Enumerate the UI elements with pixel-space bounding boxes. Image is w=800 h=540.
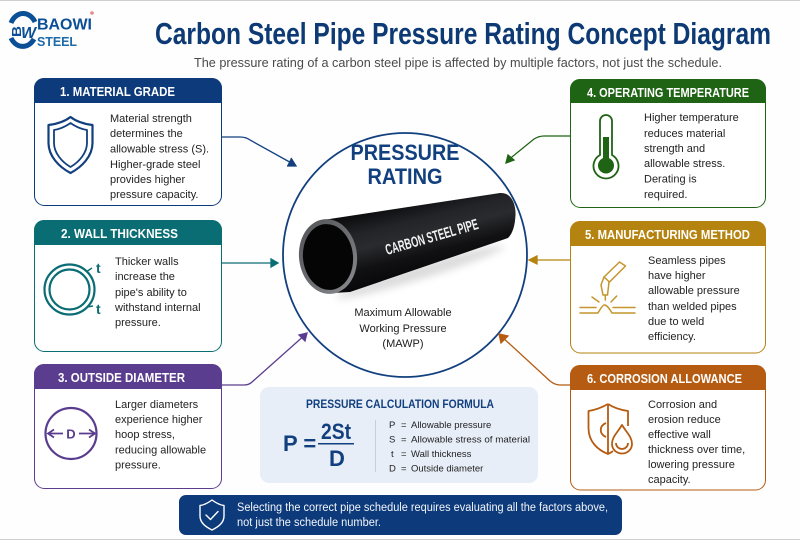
legend: formula variables: = (401, 420, 407, 431)
heading: manufacturing method: 5. MANUFACTURING METHOD (585, 227, 750, 242)
logo: Baowi Steel: BAOWI (37, 16, 92, 34)
formula: P = 2St / D: D (329, 446, 345, 471)
central circle: pressure rating (283, 133, 527, 377)
heading: operating temperature: 4. OPERATING TEMPERATURE (587, 85, 749, 100)
formula: P = 2St / D: P = (283, 431, 316, 456)
text: outside diameter: reducing allowable (115, 444, 206, 456)
arrow: corrosion allowance to centre (499, 334, 570, 385)
legend: formula variables: Allowable stress of material (411, 434, 530, 446)
text: manufacturing method: due to weld (648, 316, 704, 328)
panel: 2. wall thickness (34, 220, 222, 352)
subtitle: The pressure rating of a carbon steel pipe is affected by multiple factors, not just the schedule. (194, 56, 722, 70)
legend: formula variables: Wall thickness (411, 449, 472, 460)
text: wall thickness (114, 256, 201, 329)
heading: wall thickness: 2. WALL THICKNESS (61, 226, 178, 241)
text: wall thickness: increase the (115, 271, 175, 283)
legend: formula variables: = (401, 449, 407, 460)
panel: 3. outside diameter (34, 364, 222, 488)
text: manufacturing method: efficiency. (648, 331, 696, 343)
text: MAWP: Working Pressure (359, 323, 447, 335)
formula: P = 2St / D: 2St (321, 419, 352, 444)
heading: pressure rating (350, 140, 460, 189)
text: MAWP: Maximum Allowable (354, 307, 452, 319)
logo: Baowi Steel (9, 11, 94, 49)
legend: formula variables (389, 420, 530, 474)
text: material grade: provides higher (110, 174, 186, 186)
text: wall thickness: pipe's ability to (115, 287, 187, 299)
text: corrosion allowance: thickness over time, (648, 444, 745, 456)
arrow: material grade to centre (222, 137, 296, 166)
image: carbon steel pipe (295, 193, 516, 304)
text: operating temperature: required. (644, 189, 687, 201)
panel: 1. material grade (34, 78, 222, 206)
text: takeaway: not just the schedule number. (237, 517, 381, 529)
icon: corroded shield and drop (588, 404, 632, 454)
arrow: manufacturing method to centre (529, 256, 570, 264)
panel: 5. manufacturing method (570, 221, 766, 353)
panel: pressure calculation formula (260, 387, 538, 483)
text: operating temperature: Higher temperature (644, 112, 739, 124)
legend: formula variables: = (401, 434, 407, 446)
legend: formula variables: Outside diameter (411, 464, 483, 474)
text: outside diameter: Larger diameters (115, 399, 199, 411)
text: material grade: allowable stress (S). (110, 144, 209, 156)
heading: corrosion allowance: 6. CORROSION ALLOWANCE (587, 371, 742, 386)
text: corrosion allowance: erosion reduce (648, 414, 721, 426)
legend: formula variables: = (401, 464, 407, 474)
arrow: wall thickness to centre (222, 259, 278, 267)
text: outside diameter (115, 399, 206, 472)
text: material grade: determines the (110, 128, 183, 140)
logo: Baowi Steel: B (9, 26, 24, 37)
text: material grade: Higher-grade steel (110, 159, 200, 171)
text: operating temperature: reduces material (644, 128, 725, 140)
text: wall thickness: pressure. (115, 317, 161, 329)
icon: shield (48, 117, 92, 173)
icon: shield check (200, 500, 224, 530)
text: MAWP (354, 307, 452, 350)
legend: formula variables: P (389, 420, 395, 431)
text: manufacturing method: Seamless pipes (648, 255, 726, 267)
text: corrosion allowance: lowering pressure (648, 459, 735, 471)
text: corrosion allowance: effective wall (648, 429, 711, 441)
text: wall thickness: Thicker walls (115, 256, 179, 268)
text: manufacturing method: have higher (648, 270, 706, 282)
icon: diameter circle: D (66, 426, 76, 442)
icon: thermometer (594, 115, 618, 178)
heading: pressure rating: PRESSURE (350, 140, 460, 165)
banner: takeaway (179, 495, 622, 535)
legend: formula variables: Allowable pressure (411, 420, 491, 431)
text: corrosion allowance: Corrosion and (648, 399, 717, 411)
icon: welding torch (580, 262, 635, 313)
text: material grade (110, 113, 209, 201)
legend: formula variables: D (389, 464, 396, 474)
heading: outside diameter: 3. OUTSIDE DIAMETER (58, 370, 186, 385)
arrow: outside diameter to centre (222, 333, 307, 385)
legend: formula variables: S (389, 434, 395, 446)
text: outside diameter: hoop stress, (115, 429, 175, 441)
heading: material grade: 1. MATERIAL GRADE (60, 84, 175, 99)
text: MAWP: (MAWP) (382, 338, 424, 350)
text: operating temperature: allowable stress. (644, 158, 725, 170)
heading: pressure rating: RATING (368, 164, 442, 189)
icon: pipe wall section: t (96, 260, 101, 276)
text: material grade: pressure capacity. (110, 189, 198, 201)
icon: pipe wall section (44, 260, 101, 317)
text: operating temperature: Derating is (644, 174, 697, 186)
arrow: operating temperature to centre (506, 136, 570, 163)
formula: P = 2St / D (283, 419, 354, 471)
text: corrosion allowance: capacity. (648, 474, 691, 486)
image: carbon steel pipe: CARBON STEEL PIPE (383, 216, 480, 259)
heading: formula: PRESSURE CALCULATION FORMULA (306, 399, 494, 411)
panel: 4. operating temperature (570, 79, 766, 208)
text: manufacturing method: than welded pipes (648, 301, 737, 313)
text: takeaway: Selecting the correct pipe schedule requires evaluating all the factors above, (237, 502, 608, 514)
text: takeaway (237, 502, 608, 529)
legend: formula variables: t (391, 449, 394, 460)
text: manufacturing method (648, 255, 740, 343)
text: operating temperature (644, 112, 739, 201)
icon: diameter circle (46, 408, 96, 459)
text: outside diameter: pressure. (115, 460, 161, 472)
panel: 6. corrosion allowance (570, 365, 766, 490)
logo: Baowi Steel: STEEL (37, 35, 77, 49)
text: material grade: Material strength (110, 113, 192, 125)
text: outside diameter: experience higher (115, 414, 203, 426)
icon: pipe wall section: t (96, 301, 101, 317)
text: manufacturing method: allowable pressure (648, 285, 740, 297)
text: wall thickness: withstand internal (114, 302, 201, 314)
text: operating temperature: strength and (644, 143, 705, 155)
logo: Baowi Steel: W (21, 25, 38, 42)
text: corrosion allowance (648, 399, 745, 486)
